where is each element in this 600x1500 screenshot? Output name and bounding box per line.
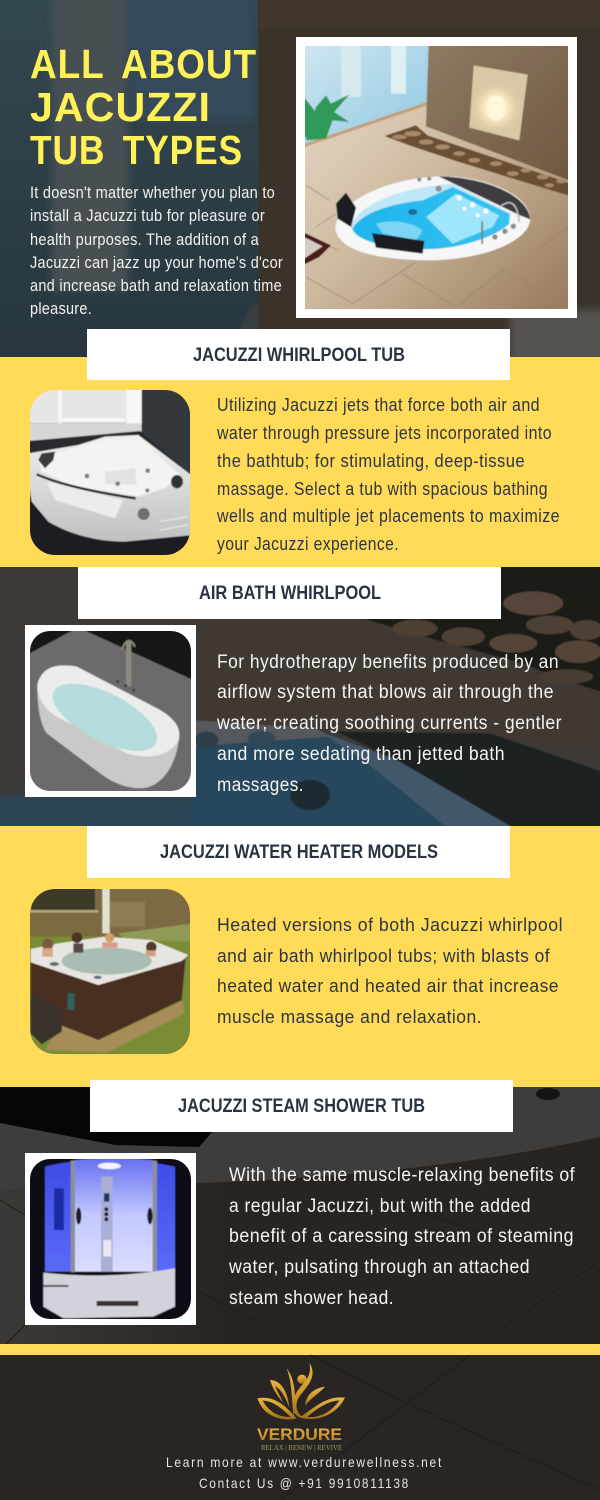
steam shower description: With the same muscle-relaxing benefits of bbox=[229, 1165, 575, 1186]
water heater description bbox=[217, 914, 563, 1027]
steam shower description: a regular Jacuzzi, but with the added bbox=[229, 1196, 531, 1217]
heading band: jacuzzi water heater models: JACUZZI WATER HEATER MODELS bbox=[160, 842, 438, 863]
air bath description: For hydrotherapy benefits produced by an bbox=[217, 652, 559, 673]
intro paragraph: install a Jacuzzi tub for pleasure or bbox=[30, 207, 265, 225]
section band: dark steam shower background bbox=[0, 1087, 600, 1350]
whirlpool description: the bathtub; for stimulating, deep-tissue bbox=[217, 450, 525, 471]
hero photo: round jacuzzi bbox=[296, 37, 577, 318]
heading band: jacuzzi steam shower tub bbox=[90, 1080, 513, 1132]
footer contact text: Learn more at www.verdurewellness.net bbox=[166, 1454, 443, 1470]
footer background bbox=[0, 1355, 600, 1500]
water heater description: and air bath whirlpool tubs; with blasts of bbox=[217, 945, 550, 966]
photo: outdoor hot tub bbox=[28, 887, 193, 1057]
intro paragraph: It doesn't matter whether you plan to bbox=[30, 184, 275, 202]
logo wordmark: VERDURE bbox=[257, 1426, 342, 1444]
air bath description: massages. bbox=[217, 775, 304, 796]
logo wordmark bbox=[257, 1426, 342, 1452]
air bath description: airflow system that blows air through the bbox=[217, 682, 554, 703]
water heater description: muscle massage and relaxation. bbox=[217, 1006, 482, 1027]
photo: corner whirlpool tub bbox=[28, 388, 193, 557]
heading band: jacuzzi whirlpool tub bbox=[87, 329, 510, 380]
photo: freestanding air bath bbox=[25, 625, 196, 797]
intro paragraph: Jacuzzi can jazz up your home's d'cor bbox=[30, 254, 283, 272]
whirlpool description: massage. Select a tub with spacious bathing bbox=[217, 478, 548, 499]
water heater description: Heated versions of both Jacuzzi whirlpool bbox=[217, 914, 563, 935]
yellow footer stripe bbox=[0, 1344, 600, 1355]
heading band: jacuzzi water heater models bbox=[87, 826, 510, 878]
heading band: jacuzzi steam shower tub: JACUZZI STEAM SHOWER TUB bbox=[178, 1096, 425, 1117]
steam shower description bbox=[228, 1165, 575, 1309]
steam shower description: benefit of a caressing stream of steaming bbox=[229, 1226, 574, 1247]
steam shower description: water, pulsating through an attached bbox=[228, 1257, 530, 1278]
logo wordmark: RELAX | RENEW | REVIVE bbox=[261, 1444, 342, 1452]
title: JACUZZI bbox=[30, 84, 211, 130]
header background photo bbox=[0, 0, 600, 370]
water heater description: heated water and heated air that increase bbox=[217, 975, 559, 996]
section band: yellow whirlpool bbox=[0, 357, 600, 567]
air bath description bbox=[216, 652, 562, 796]
section band: dark air bath background bbox=[0, 560, 600, 835]
whirlpool description: water through pressure jets incorporated into bbox=[216, 422, 552, 443]
title: ALL ABOUT bbox=[30, 41, 257, 87]
intro paragraph: and increase bath and relaxation time bbox=[30, 277, 282, 295]
steam shower description: steam shower head. bbox=[229, 1288, 394, 1309]
air bath description: water; creating soothing currents - gentler bbox=[216, 713, 562, 734]
whirlpool description bbox=[216, 394, 560, 554]
heading band: air bath whirlpool: AIR BATH WHIRLPOOL bbox=[199, 583, 381, 604]
section band: yellow water heater bbox=[0, 826, 600, 1087]
whirlpool description: Utilizing Jacuzzi jets that force both air and bbox=[217, 394, 540, 415]
heading band: jacuzzi whirlpool tub: JACUZZI WHIRLPOOL TUB bbox=[193, 345, 405, 366]
intro paragraph bbox=[30, 184, 283, 318]
title bbox=[30, 41, 257, 173]
intro paragraph: pleasure. bbox=[30, 300, 92, 318]
title: TUB TYPES bbox=[30, 127, 243, 173]
whirlpool description: your Jacuzzi experience. bbox=[217, 533, 399, 554]
logo: Verdure lotus bbox=[257, 1363, 345, 1419]
footer contact text: Contact Us @ +91 9910811138 bbox=[199, 1475, 410, 1491]
footer contact text bbox=[166, 1454, 443, 1491]
photo: steam shower cabin bbox=[25, 1153, 196, 1325]
heading band: air bath whirlpool bbox=[78, 567, 501, 619]
air bath description: and more sedating than jetted bath bbox=[217, 744, 505, 765]
intro paragraph: health purposes. The addition of a bbox=[30, 231, 259, 249]
